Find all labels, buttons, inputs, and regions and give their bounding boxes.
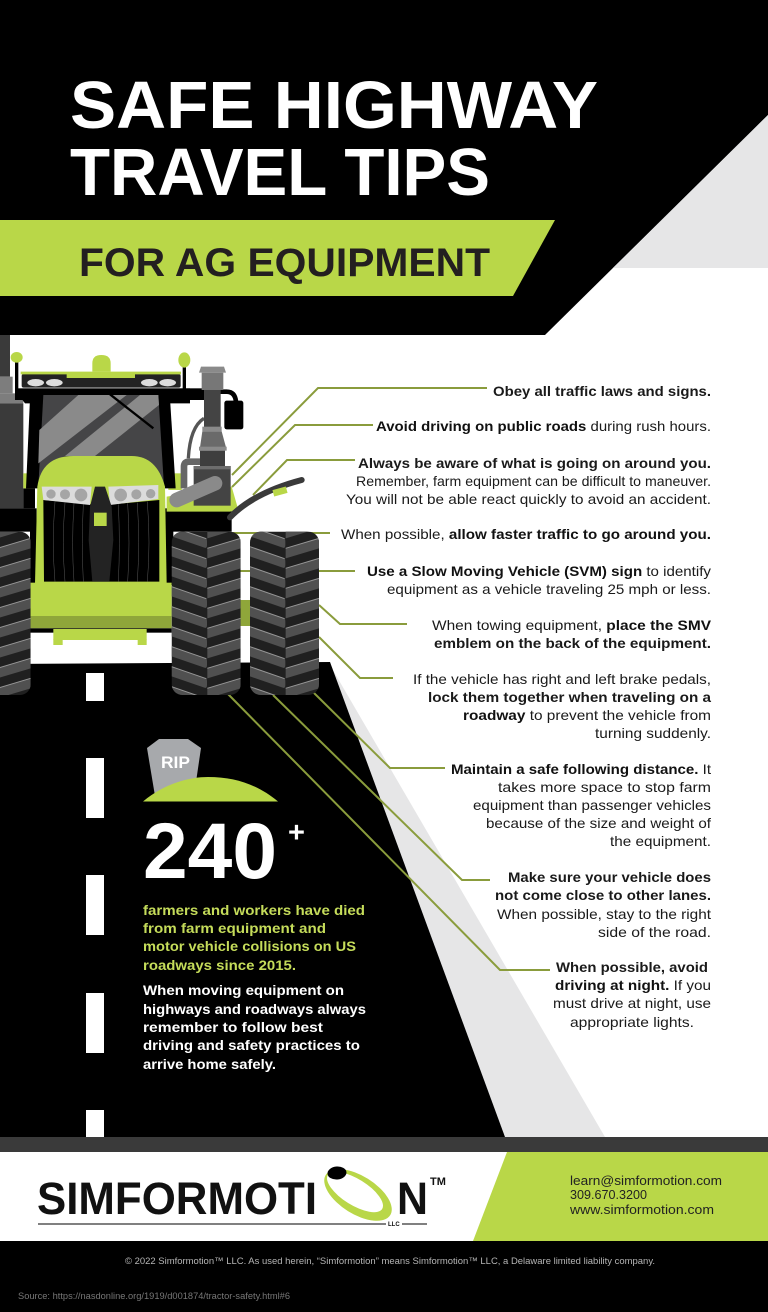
tip: lanes: side of the road. — [598, 924, 711, 940]
tip: SMV emblem: emblem on the back of the equipment. — [434, 635, 711, 651]
cab roof lights — [11, 352, 207, 403]
contact panel: 309.670.3200 — [570, 1187, 647, 1202]
tractor illustration — [0, 335, 319, 708]
icon: gravestone — [143, 739, 278, 802]
logo: N — [397, 1173, 428, 1224]
tip: following distance: the equipment. — [610, 833, 711, 849]
tip: brake pedals: If the vehicle has right and left brake pedals, — [413, 671, 711, 687]
tip: SVM sign — [367, 563, 711, 597]
tip: brake pedals — [413, 671, 711, 741]
safety reminder text: highways and roadways always — [143, 1001, 366, 1017]
tip: SVM sign: Use a Slow Moving Vehicle (SVM) sign to identify — [367, 563, 711, 579]
footer band — [0, 1137, 768, 1152]
tip: rush hours: Avoid driving on public roads during rush hours. — [376, 418, 711, 434]
tip: night driving — [553, 959, 711, 1030]
tip: awareness: You will not be able react quickly to avoid an accident. — [346, 491, 711, 507]
left rear pillar — [0, 335, 23, 508]
road centre dashes — [86, 673, 104, 1137]
safety reminder text — [143, 982, 366, 1072]
statistic 240+: 240 — [143, 806, 277, 895]
logo: TM — [430, 1176, 446, 1188]
title: TRAVEL TIPS — [70, 135, 490, 210]
tip: awareness: Always be aware of what is going on around you. — [358, 455, 711, 471]
road — [0, 662, 505, 1137]
leader lines — [227, 388, 550, 970]
hood — [35, 456, 167, 583]
subtitle banner: FOR AG EQUIPMENT — [79, 241, 490, 285]
tip: traffic laws: Obey all traffic laws and signs. — [493, 383, 711, 399]
icon: gravestone: RIP — [161, 753, 190, 772]
safety reminder text: When moving equipment on — [143, 982, 344, 998]
side hood — [167, 487, 238, 512]
centre wheel — [172, 518, 241, 708]
title: SAFE HIGHWAY — [70, 68, 598, 143]
fatalities text: roadways since 2015. — [143, 957, 296, 973]
fatalities text: from farm equipment and — [143, 920, 326, 936]
safety reminder text: arrive home safely. — [143, 1056, 276, 1072]
fatalities text: farmers and workers have died — [143, 902, 365, 918]
tip: night driving: must drive at night, use — [553, 995, 711, 1011]
right wheel — [250, 518, 319, 708]
tip: following distance: takes more space to stop farm — [498, 779, 711, 795]
logo: SIMFORMOTI — [37, 1173, 317, 1224]
grille — [42, 485, 159, 582]
side handrail — [230, 480, 302, 517]
tip: lanes: When possible, stay to the right — [497, 906, 711, 922]
tip: SVM sign: equipment as a vehicle traveling 25 mph or less. — [387, 581, 711, 597]
tip: SMV emblem: When towing equipment, place the SMV — [432, 617, 712, 633]
grey corner triangle — [613, 115, 768, 268]
contact panel: www.simformotion.com — [569, 1202, 714, 1217]
tip: night driving: driving at night. If you — [555, 977, 711, 993]
tip: lanes: not come close to other lanes. — [495, 887, 711, 903]
tips list — [341, 383, 712, 1030]
cab and windscreen — [26, 394, 176, 488]
tip: awareness: Remember, farm equipment can be difficult to maneuver. — [356, 473, 711, 489]
statistic 240+: + — [288, 817, 305, 849]
tip: awareness — [346, 455, 711, 507]
tip: following distance: Maintain a safe following distance. It — [451, 761, 711, 777]
title — [70, 68, 598, 210]
footer black bar — [0, 1241, 768, 1312]
road shoulder — [330, 665, 605, 1137]
tip: night driving: appropriate lights. — [570, 1014, 694, 1030]
tip: lanes: Make sure your vehicle does — [508, 869, 711, 885]
header black panel — [0, 0, 768, 335]
tip: night driving: When possible, avoid — [556, 959, 708, 975]
cab side green panels — [23, 473, 182, 490]
contact panel: learn@simformotion.com — [570, 1173, 722, 1188]
tip: SMV emblem — [432, 617, 712, 651]
tip: faster traffic: When possible, allow faster traffic to go around you. — [341, 526, 711, 542]
safety reminder text: driving and safety practices to — [143, 1037, 360, 1053]
tip: brake pedals: roadway to prevent the vehicle from — [463, 707, 711, 723]
logo: LLC — [388, 1222, 400, 1228]
tip: brake pedals: lock them together when traveling on a — [428, 689, 711, 705]
tip: following distance: equipment than passenger vehicles — [473, 797, 711, 813]
safety reminder text: remember to follow best — [143, 1019, 323, 1035]
axle — [240, 600, 251, 626]
tip: following distance — [451, 761, 711, 849]
subtitle banner — [0, 220, 555, 296]
front bumper — [30, 583, 172, 645]
chassis — [0, 488, 232, 585]
tip: brake pedals: turning suddenly. — [595, 725, 711, 741]
tip: lanes — [495, 869, 711, 940]
source: Source: https://nasdonline.org/1919/d001874/tractor-safety.html#6 — [18, 1291, 290, 1301]
copyright: © 2022 Simformotion™ LLC. As used herein, “Simformotion” means Simformotion™ LLC, a Delaware limited liability company. — [125, 1256, 655, 1267]
logo — [37, 1159, 446, 1231]
fatalities text: motor vehicle collisions on US — [143, 938, 356, 954]
fatalities text — [143, 902, 365, 973]
contact panel — [473, 1152, 768, 1241]
exhaust stack — [177, 367, 243, 506]
left wheel — [0, 518, 31, 708]
tip: following distance: because of the size and weight of — [486, 815, 711, 831]
